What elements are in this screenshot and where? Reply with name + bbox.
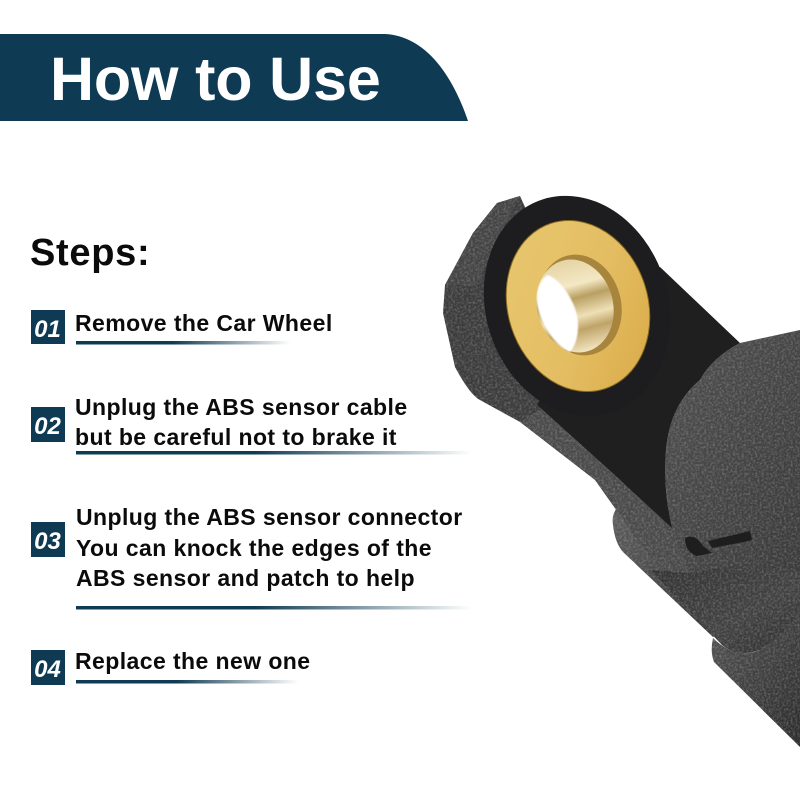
step 01: Remove the Car Wheel (75, 310, 333, 336)
step 03: 03 (34, 528, 61, 555)
step 03: Unplug the ABS sensor connector (76, 504, 463, 530)
step 01: 01 (34, 316, 61, 343)
back housing (443, 196, 570, 422)
step 04: Replace the new one (75, 648, 310, 674)
title: How to Use (50, 45, 381, 113)
tail below collar (712, 605, 800, 747)
step 02: 02 (34, 413, 61, 440)
step 02: but be careful not to brake it (75, 424, 397, 450)
large cylinder (665, 330, 800, 573)
header banner (0, 34, 468, 121)
textured plastic parts (443, 196, 800, 747)
collar shoulder (650, 567, 800, 653)
photo: ABS sensor (443, 171, 800, 747)
lower sensor body (613, 505, 800, 637)
heading: steps: Steps: (30, 232, 150, 274)
black arm (537, 267, 740, 528)
outer ring (456, 171, 698, 441)
connector notch (685, 531, 752, 556)
step 02 (31, 394, 472, 454)
step 04: 04 (34, 656, 61, 683)
step 03: You can knock the edges of the (76, 535, 432, 561)
arm edge strip (520, 405, 690, 573)
brass washer (485, 202, 671, 410)
bore rim (527, 245, 633, 365)
housing top facet (445, 196, 520, 285)
step 03 (31, 504, 472, 610)
step 04 (31, 648, 310, 685)
hole (537, 275, 578, 352)
step 02: Unplug the ABS sensor cable (75, 394, 408, 420)
step 01 (31, 310, 333, 344)
bore inner wall (526, 251, 624, 361)
step 03: ABS sensor and patch to help (76, 565, 415, 591)
